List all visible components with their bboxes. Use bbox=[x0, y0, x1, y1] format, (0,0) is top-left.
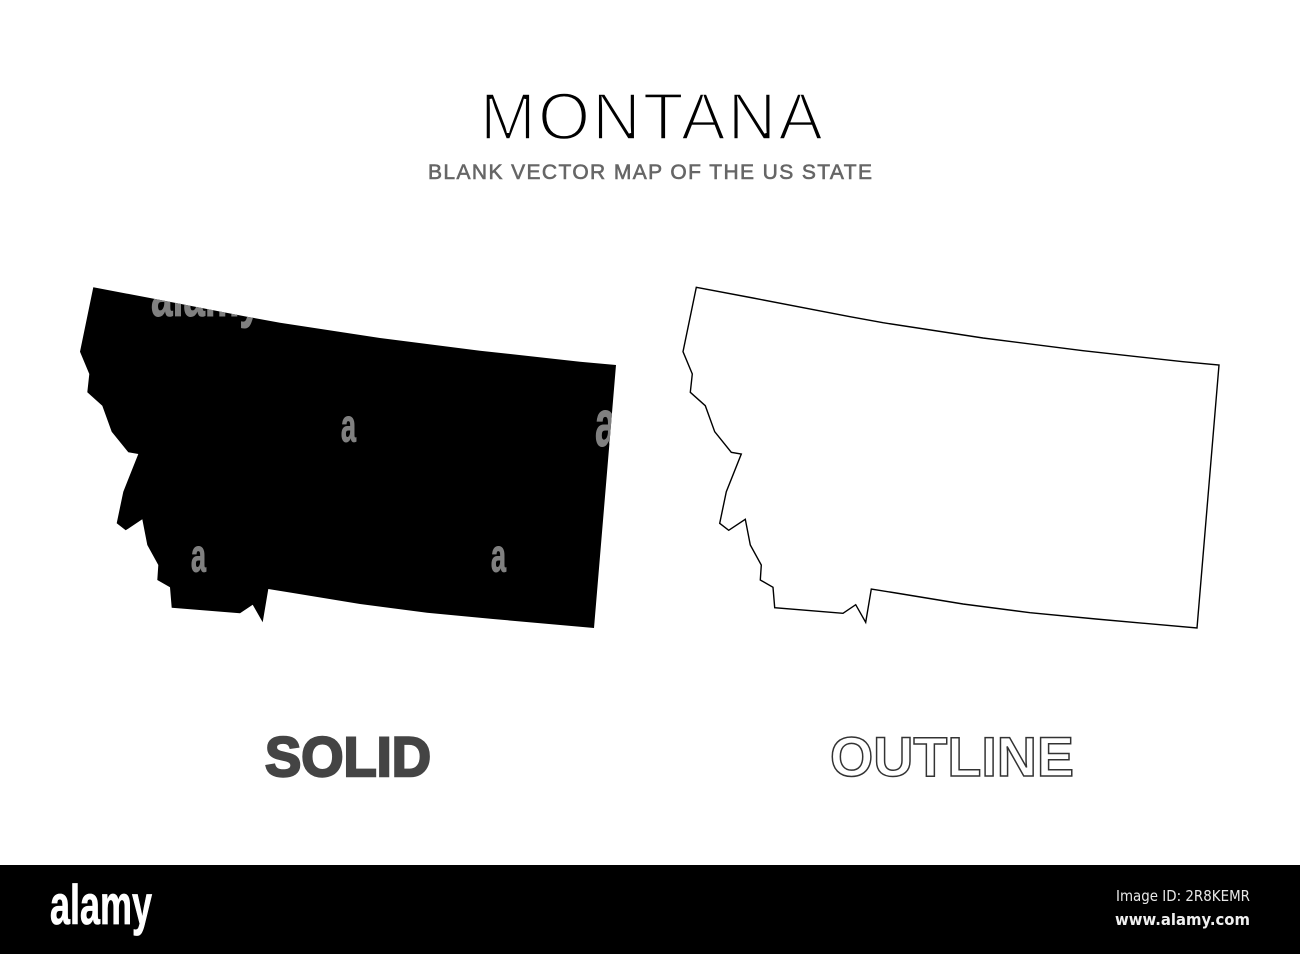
watermark letter lower left: a bbox=[191, 530, 206, 582]
outline label: OUTLINE bbox=[830, 725, 1074, 788]
footer logo: alamy bbox=[50, 873, 152, 936]
subtitle: BLANK VECTOR MAP OF THE US STATE bbox=[428, 161, 872, 184]
solid label: SOLID bbox=[265, 725, 431, 788]
watermark letter lower right: a bbox=[491, 530, 506, 582]
watermark letter centre: a bbox=[341, 400, 356, 452]
title: MONTANA bbox=[480, 80, 823, 154]
image id: Image ID: 2R8KEMR bbox=[1116, 887, 1250, 905]
watermark word on solid map: alamy bbox=[151, 264, 261, 329]
solid map bbox=[80, 264, 617, 628]
footer bar bbox=[0, 865, 1300, 954]
outline map bbox=[683, 287, 1219, 628]
watermark letter right edge: a bbox=[595, 386, 617, 460]
website: www.alamy.com bbox=[1115, 910, 1250, 929]
